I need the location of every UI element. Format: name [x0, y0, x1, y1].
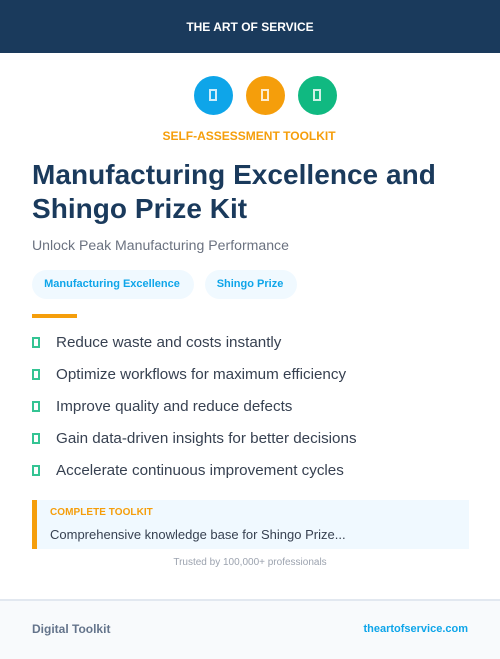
benefit 1: Reduce waste and costs instantly: [56, 334, 281, 351]
benefit 5: Accelerate continuous improvement cycles: [56, 462, 344, 479]
check icon 3: [32, 401, 40, 412]
tag: Manufacturing Excellence: Manufacturing Excellence: [44, 278, 180, 290]
benefit 2: Optimize workflows for maximum efficiency: [56, 366, 346, 383]
trust line: Trusted by 100,000+ professionals: [173, 557, 327, 568]
eyebrow label: SELF-ASSESSMENT TOOLKIT: [162, 129, 336, 143]
footer: [0, 599, 500, 659]
callout panel: [32, 500, 469, 549]
check icon 2: [32, 369, 40, 380]
callout text: Comprehensive knowledge base for Shingo Prize...: [50, 527, 346, 542]
callout heading: COMPLETE TOOLKIT: [50, 507, 153, 518]
benefit 4: Gain data-driven insights for better decisions: [56, 430, 357, 447]
icon: green circle: [298, 76, 337, 115]
check icon 1: [32, 337, 40, 348]
icon: blue circle: [194, 76, 233, 115]
footer link: theartofservice.com: [363, 623, 468, 635]
footer left label: Digital Toolkit: [32, 622, 110, 636]
accent divider: [32, 314, 77, 318]
check icon 4: [32, 433, 40, 444]
tag: Shingo Prize: [205, 270, 297, 299]
benefit list: [32, 334, 357, 479]
header bar: [0, 0, 500, 53]
tag: Shingo Prize: Shingo Prize: [217, 278, 283, 290]
title: [32, 159, 436, 224]
icon: orange circle: [246, 76, 285, 115]
benefit 3: Improve quality and reduce defects: [56, 398, 292, 415]
title: Shingo Prize Kit: [32, 193, 247, 224]
tag: Manufacturing Excellence: [32, 270, 194, 299]
title: Manufacturing Excellence and: [32, 159, 436, 190]
check icon 5: [32, 465, 40, 476]
subtitle: Unlock Peak Manufacturing Performance: [32, 237, 289, 253]
header bar: THE ART OF SERVICE: [186, 20, 314, 34]
